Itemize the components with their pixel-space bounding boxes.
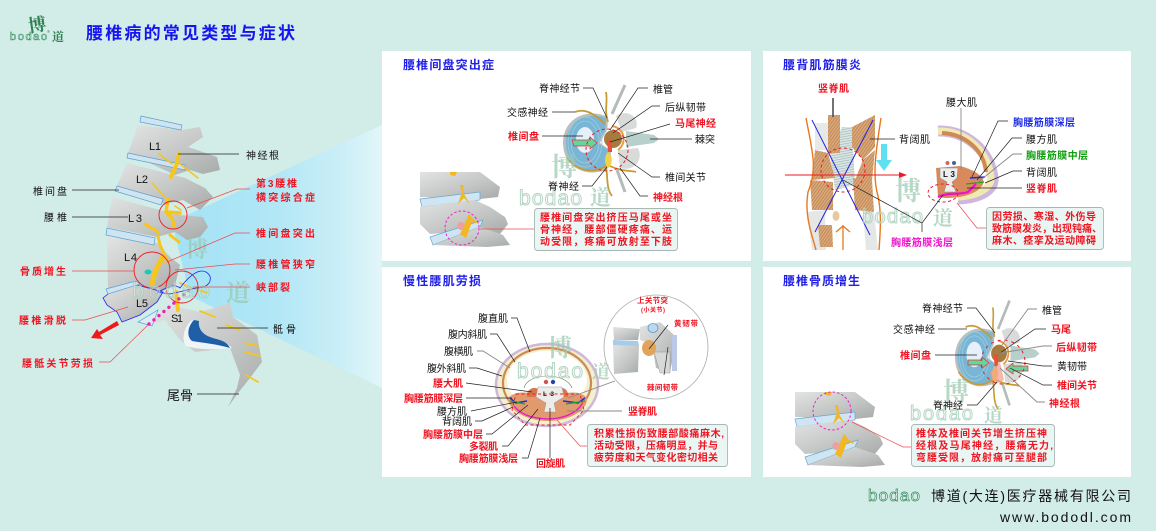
callout — [986, 208, 1104, 250]
labels: 神经根 — [1049, 397, 1080, 410]
disc diagram — [563, 85, 659, 196]
labels: 腰方肌 — [1026, 133, 1057, 146]
labels: 椎间盘 — [900, 349, 931, 362]
labels: 脊神经节 — [539, 82, 580, 95]
nerves — [145, 154, 260, 382]
callout: 活动受限，压痛明显，并与 — [594, 439, 718, 452]
panel: chronic lumbar strain — [382, 267, 751, 477]
labels: 胸腰筋膜浅层 — [459, 452, 518, 465]
labels: 马尾 — [1051, 324, 1071, 336]
spine labels: L5 — [136, 298, 148, 310]
leader lines — [72, 154, 268, 394]
callout: 骨神经，腰部僵硬疼痛、运 — [540, 223, 672, 236]
watermark — [910, 372, 1003, 428]
labels: 竖脊肌 — [818, 82, 849, 95]
labels: 胸腰筋膜中层 — [423, 428, 483, 441]
labels: 椎间关节 — [1057, 379, 1097, 392]
labels: 背阔肌 — [442, 415, 472, 428]
spine labels: L4 — [124, 252, 137, 264]
inset circle: facet ligaments: 棘间韧带 — [647, 382, 678, 392]
footer logo: bodao — [868, 486, 920, 505]
spine labels: 尾骨 — [167, 388, 193, 403]
panel: lumbar myofasciitis — [763, 51, 1131, 261]
labels: 竖脊肌 — [1026, 182, 1057, 195]
watermark: 博 — [548, 328, 572, 363]
leader lines — [833, 98, 1022, 232]
labels: 椎管 — [1042, 304, 1062, 317]
logo: 博 — [26, 10, 48, 38]
spine labels: L1 — [149, 141, 161, 153]
labels — [507, 82, 716, 204]
labels: 腰方肌 — [437, 405, 467, 418]
labels: 背阔肌 — [899, 133, 930, 146]
spine labels: 骶骨 — [273, 324, 296, 336]
discs — [106, 116, 185, 326]
callout: 椎体及椎间关节增生挤压神 — [916, 427, 1047, 440]
logo: bodao — [10, 31, 47, 43]
magenta dashed circle — [813, 392, 851, 430]
watermark — [132, 233, 250, 308]
cross-section diagram — [928, 131, 993, 202]
labels: 棘突 — [695, 133, 715, 146]
logo: ® — [47, 29, 50, 34]
red circles — [134, 201, 198, 303]
labels: 腰大肌 — [433, 377, 463, 390]
watermark: bodao — [862, 206, 923, 228]
callout — [588, 424, 728, 466]
callout — [912, 424, 1054, 466]
logo: 道 — [52, 28, 64, 45]
spine labels: 腰骶关节劳损 — [22, 357, 93, 370]
watermark: 博 — [943, 372, 969, 409]
labels: 黄韧带 — [1057, 360, 1087, 373]
spine labels: 神经根 — [246, 149, 279, 162]
labels: 背阔肌 — [1026, 166, 1057, 179]
labels: 胸腰筋膜浅层 — [891, 236, 953, 249]
inset circle: facet ligaments — [568, 295, 708, 399]
labels: 椎管 — [653, 83, 673, 96]
labels: 胸腰筋膜深层 — [1013, 116, 1075, 129]
inset circle: facet ligaments: 黄韧带 — [674, 318, 698, 328]
spine labels: 峡部裂 — [256, 281, 290, 294]
spine labels: 第3腰椎 — [256, 177, 297, 190]
cross-section diagram: L3 — [943, 170, 956, 179]
spine labels: 骨质增生 — [20, 265, 66, 278]
labels: 竖脊肌 — [628, 405, 657, 418]
labels: 腹横肌 — [444, 345, 473, 358]
labels: 腹内斜肌 — [448, 328, 487, 341]
spine illustration — [91, 116, 262, 407]
watermark: 博 — [895, 171, 921, 208]
disc diagram — [955, 301, 1039, 409]
callout: 动受限，疼痛可放射至下肢 — [540, 235, 672, 248]
spine labels: 椎间盘突出 — [256, 227, 315, 240]
spine labels: 椎间盘 — [33, 185, 67, 198]
magenta dashed circle — [445, 211, 479, 245]
teal spur — [144, 270, 152, 274]
spine labels: 腰椎滑脱 — [19, 314, 66, 327]
labels: 腹外斜肌 — [427, 362, 466, 375]
labels: 交感神经 — [893, 323, 935, 336]
red slip arrow — [91, 321, 119, 339]
watermark: 博 — [551, 147, 577, 184]
labels: 后纵韧带 — [665, 102, 706, 114]
callout: 疲劳度和天气变化密切相关 — [594, 451, 718, 464]
spine labels — [19, 141, 315, 403]
callout: 积累性损伤致腰部酸痛麻木, — [594, 427, 724, 440]
body cross-section — [496, 344, 598, 426]
spine thumbnail — [795, 392, 885, 467]
callout: 麻木、痉挛及运动障碍 — [992, 234, 1096, 247]
blue outline of stenosis — [157, 271, 210, 294]
callout: 因劳损、寒湿、外伤导 — [992, 210, 1096, 223]
red arrow — [785, 174, 900, 176]
callout: 腰椎间盘突出挤压马尾或坐 — [540, 211, 672, 224]
watermark: bodao — [910, 403, 973, 425]
website: www.bododl.com — [999, 509, 1131, 525]
callout: 弯腰受限，放射痛可至腿部 — [916, 451, 1047, 464]
red dashed circle — [821, 148, 865, 192]
watermark: bodao — [132, 278, 210, 303]
watermark: 道 — [933, 202, 953, 231]
labels: 腹直肌 — [478, 312, 508, 325]
watermark: 道 — [590, 182, 611, 212]
watermark: bodao — [517, 360, 583, 383]
labels: 脊神经节 — [922, 302, 963, 315]
spine labels: L2 — [136, 174, 148, 186]
panel: lumbar disc herniation — [382, 51, 751, 261]
labels: 后纵韧带 — [1056, 341, 1097, 354]
labels: 胸腰筋膜深层 — [404, 392, 463, 405]
spine labels: 腰椎 — [44, 211, 67, 224]
heading: 腰背肌筋膜炎 — [783, 57, 861, 72]
leader lines — [480, 88, 692, 229]
panel: lumbar osteophyte — [763, 267, 1131, 477]
blue arrows — [812, 120, 873, 235]
labels: 脊神经 — [548, 180, 579, 193]
heading: 慢性腰肌劳损 — [403, 273, 481, 288]
blue projection wedge — [172, 125, 382, 388]
labels: 椎间关节 — [665, 171, 706, 184]
title: 腰椎病的常见类型与症状 — [86, 23, 295, 43]
watermark: 道 — [592, 358, 610, 384]
logo — [10, 10, 64, 45]
labels: 胸腰筋膜中层 — [1026, 149, 1088, 162]
leader lines — [852, 308, 1052, 447]
spine labels: 腰椎管狭窄 — [256, 258, 315, 271]
labels: 脊神经 — [933, 399, 963, 412]
spine bones — [103, 125, 262, 407]
inset circle: facet ligaments: 上关节突 — [637, 295, 668, 305]
watermark: 博 — [186, 233, 208, 264]
callout: 经根及马尾神经，腰痛无力, — [916, 439, 1053, 452]
labels — [404, 312, 657, 470]
spine labels: L3 — [128, 213, 142, 225]
spine labels: 横突综合症 — [256, 191, 315, 204]
labels: 神经根 — [653, 191, 683, 204]
leader lines — [466, 318, 622, 458]
heading: 腰椎骨质增生 — [783, 273, 860, 288]
labels: 交感神经 — [507, 106, 548, 119]
labels — [818, 82, 1088, 249]
spine thumbnail — [420, 172, 510, 247]
watermark — [862, 171, 953, 231]
heading: 腰椎间盘突出症 — [403, 57, 494, 72]
company name: 博道(大连)医疗器械有限公司 — [931, 488, 1131, 504]
cyan arrow — [876, 144, 892, 171]
watermark — [519, 147, 611, 212]
labels: 多裂肌 — [469, 440, 498, 453]
labels: 椎间盘 — [508, 130, 539, 143]
watermark — [517, 328, 610, 384]
callout: 致筋膜发炎，出现钝痛、 — [992, 222, 1102, 235]
watermark: 道 — [984, 401, 1003, 428]
watermark: 道 — [226, 273, 250, 308]
watermark: bodao — [519, 187, 582, 210]
spine labels: S1 — [171, 313, 183, 325]
back muscles figure — [785, 115, 907, 250]
body cross-section: L3 — [543, 391, 554, 398]
magenta dotted line — [149, 287, 193, 324]
labels: 回旋肌 — [536, 457, 565, 470]
callout — [534, 208, 678, 250]
labels: 马尾神经 — [675, 117, 716, 130]
labels — [893, 302, 1097, 412]
inset circle: facet ligaments: (小关节) — [641, 306, 665, 314]
labels: 腰大肌 — [946, 96, 977, 109]
